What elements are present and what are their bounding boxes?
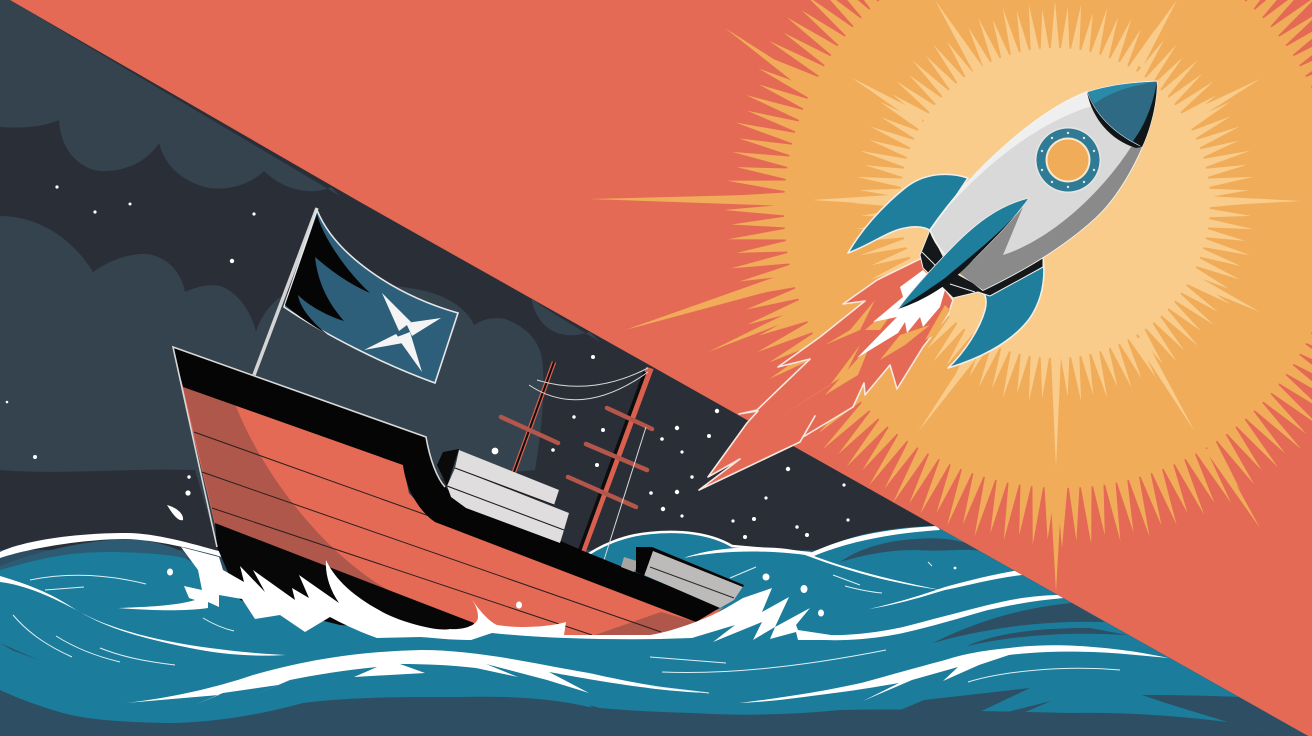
black bands at rocket tail bbox=[920, 230, 1043, 298]
navy shadow under left crest bbox=[0, 539, 190, 570]
thin wave highlights bbox=[13, 562, 1120, 693]
tail band stripes bbox=[922, 252, 975, 292]
orange flame streaks bbox=[778, 295, 950, 418]
yard arms bbox=[501, 408, 652, 507]
body shadow bbox=[958, 147, 1142, 290]
white flame core bbox=[857, 270, 945, 358]
sea bbox=[0, 526, 1312, 736]
lower foam band bbox=[126, 650, 709, 705]
hull shaded bow bbox=[183, 387, 474, 625]
porthole bbox=[1035, 127, 1101, 193]
storm clouds bbox=[0, 0, 600, 545]
hull coral side bbox=[180, 380, 724, 636]
rocket bbox=[848, 81, 1157, 368]
navy wave streaks bbox=[0, 538, 1312, 736]
flag pole bbox=[254, 208, 317, 375]
foreground water spray bbox=[0, 547, 1169, 705]
body highlight bbox=[945, 93, 1092, 210]
sea spray dots bbox=[167, 567, 956, 616]
upper cloud bbox=[0, 0, 340, 196]
hull shaded stern bbox=[592, 612, 696, 636]
rocket flame bbox=[699, 258, 953, 490]
sun long orange rays bbox=[590, 28, 1260, 592]
rocket body bbox=[930, 92, 1142, 290]
black deck band bbox=[173, 347, 721, 622]
outer coral flame bbox=[699, 258, 953, 490]
lower right foam band bbox=[739, 645, 1169, 703]
sun outer orange spikes bbox=[716, 0, 1312, 556]
lower cloud bbox=[0, 216, 543, 545]
main teal water body bbox=[0, 526, 1312, 736]
small cloud near the diagonal bbox=[531, 297, 600, 342]
long thin crest line on the right bbox=[869, 570, 1022, 609]
rear superstructure bbox=[621, 547, 744, 608]
left wave crest bbox=[0, 533, 222, 558]
foam tail to the right of the hull bbox=[825, 595, 1064, 640]
long sweep of foam on the left bbox=[0, 576, 286, 656]
spray around hull bbox=[118, 547, 831, 642]
sun burst bbox=[590, 0, 1312, 592]
back-wave crest bbox=[684, 526, 941, 590]
flag white pinwheel star bbox=[364, 293, 441, 372]
bow and deck outline bbox=[173, 347, 445, 547]
right fin bbox=[948, 257, 1044, 368]
sun long cream rays bbox=[812, 0, 1302, 468]
stars bbox=[6, 185, 850, 539]
flying water droplet bbox=[167, 505, 183, 520]
left fin bbox=[848, 174, 968, 253]
main superstructure bbox=[437, 449, 569, 543]
rigging wires bbox=[529, 368, 648, 560]
plank lines bbox=[194, 432, 661, 635]
back wave behind the ship's stern bbox=[588, 530, 812, 588]
nose cone bbox=[1087, 81, 1157, 147]
nose shadow bbox=[1087, 81, 1157, 148]
keel bbox=[215, 523, 474, 634]
flag bbox=[284, 210, 458, 383]
center fin shadow bbox=[898, 198, 1029, 309]
flag black pattern bbox=[285, 214, 370, 335]
nose highlight bbox=[1088, 82, 1155, 104]
masts behind the ship bbox=[514, 362, 650, 554]
sun inner cream disc and spikes bbox=[849, 0, 1261, 409]
flag cloth bbox=[284, 210, 458, 383]
navy deep sea bbox=[0, 550, 1312, 736]
center fin bbox=[898, 198, 1029, 309]
sinking ship bbox=[173, 208, 744, 636]
